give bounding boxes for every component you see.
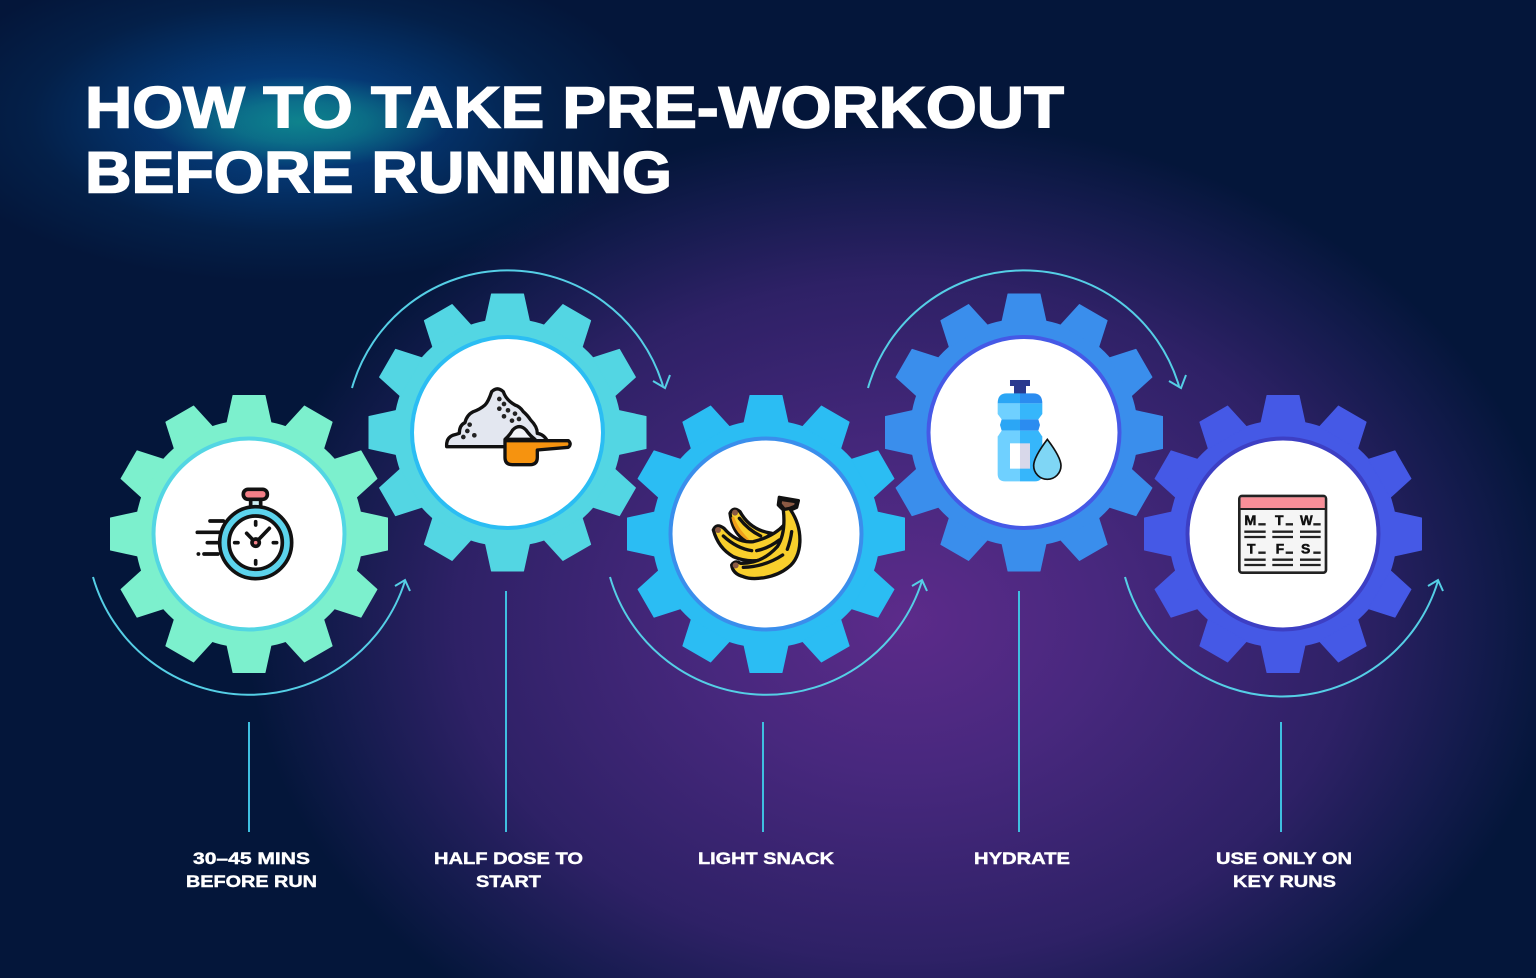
arrow: arc over gear 4 <box>868 270 1186 388</box>
label: light snack: LIGHT SNACK <box>698 849 835 868</box>
label: hydrate: HYDRATE <box>974 849 1070 868</box>
label: half dose to start: HALF DOSE TO <box>434 849 583 868</box>
gear 3: light snack <box>628 396 904 672</box>
icon: bananas <box>713 497 800 578</box>
icon: weekly calendar <box>1239 496 1326 573</box>
gear 2: half dose <box>369 294 646 571</box>
icon: weekly calendar: W <box>1300 512 1313 528</box>
icon: stopwatch <box>197 489 292 579</box>
label: use only on key runs: USE ONLY ON <box>1216 849 1352 868</box>
icon: weekly calendar: M <box>1244 512 1256 528</box>
arrow: arc under gear 5 <box>1125 577 1443 696</box>
label: 30–45 mins before run <box>186 849 317 891</box>
icon: water bottle <box>998 380 1061 481</box>
icon: weekly calendar: S <box>1301 540 1310 556</box>
label: use only on key runs <box>1216 849 1352 891</box>
icon: powder and scoop <box>447 389 570 465</box>
gear 1: timing <box>110 396 388 672</box>
label: 30–45 mins before run: 30–45 MINS <box>193 849 310 868</box>
label: half dose to start: START <box>476 872 542 891</box>
label: 30–45 mins before run: BEFORE RUN <box>186 872 317 891</box>
gear 5: key runs <box>1144 396 1422 672</box>
connector lines <box>249 591 1281 832</box>
arrow: arc under gear 1 <box>93 577 410 695</box>
label: use only on key runs: KEY RUNS <box>1233 872 1336 891</box>
icon: weekly calendar: T <box>1247 540 1256 556</box>
label: half dose to start <box>434 849 583 891</box>
icon: weekly calendar: F <box>1276 540 1285 556</box>
icon: weekly calendar: T <box>1275 512 1284 528</box>
title: HOW TO TAKE PRE-WORKOUT <box>85 76 1064 140</box>
title <box>85 76 1064 206</box>
gear 4: hydrate <box>886 294 1162 571</box>
arrow: arc under gear 3 <box>610 577 927 695</box>
title: BEFORE RUNNING <box>85 140 672 206</box>
arrow: arc over gear 2 <box>352 270 670 388</box>
